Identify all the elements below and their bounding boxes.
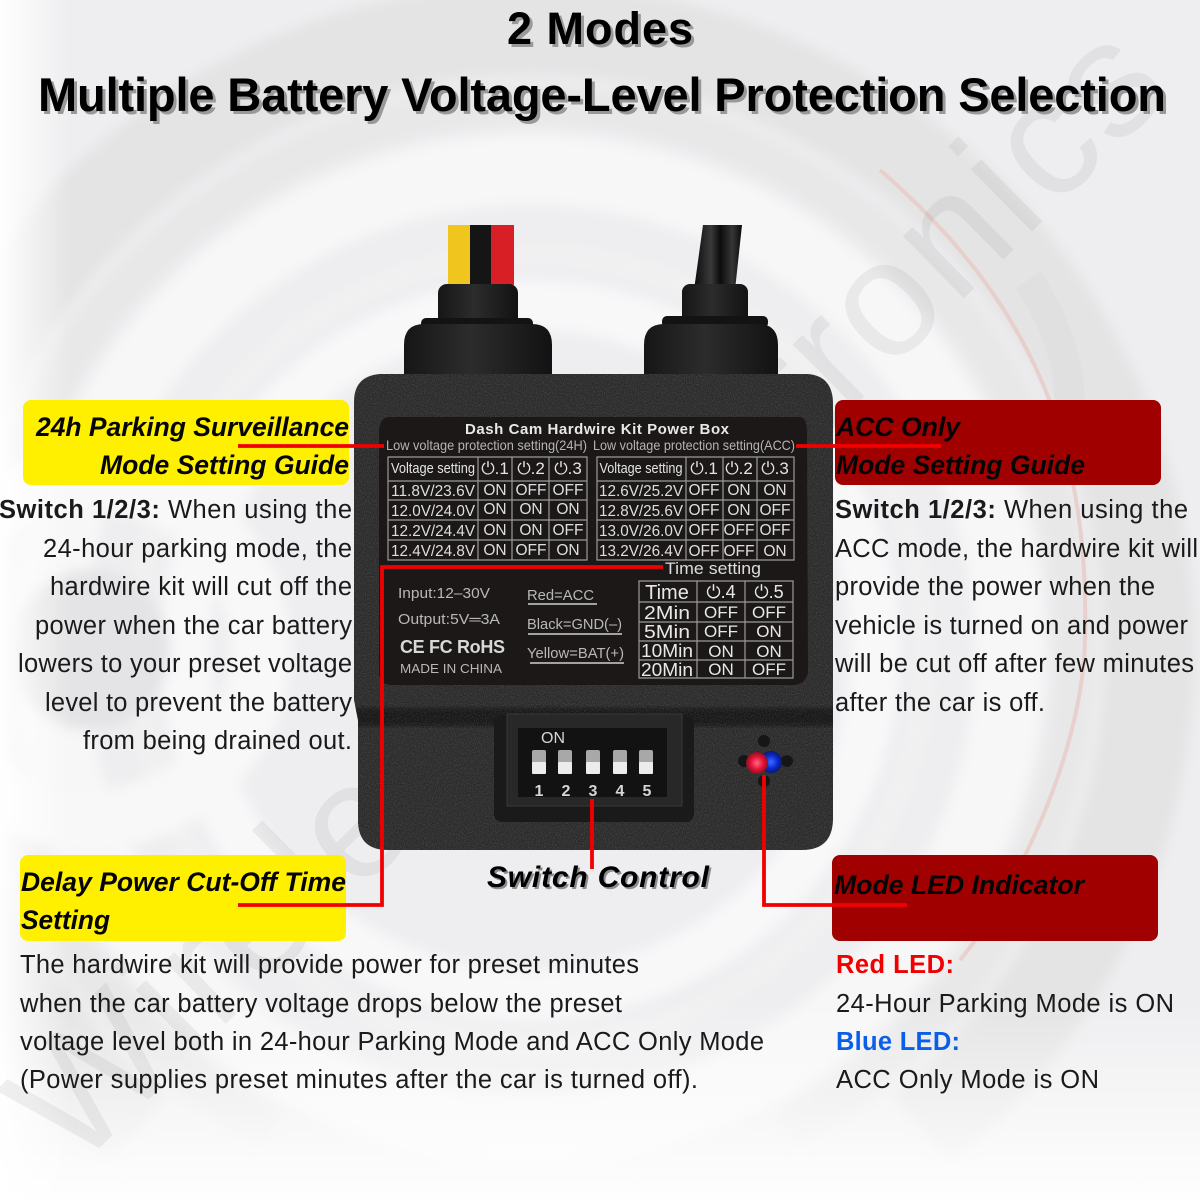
label: 24h parking guide: 24h Parking Surveillance	[35, 412, 349, 442]
text: delay description	[19, 951, 764, 1094]
text: ACC description: vehicle is turned on and power	[835, 612, 1188, 640]
switch numbers: 5	[643, 783, 652, 800]
time setting heading: Time setting	[665, 560, 761, 578]
table: ACC voltage: OFF	[724, 543, 754, 560]
text: delay description: The hardwire kit will provide power for preset minutes	[20, 951, 639, 979]
switches	[532, 750, 653, 774]
text: 24h parking description: power when the car battery	[35, 612, 352, 640]
table: ACC voltage: OFF	[688, 482, 720, 499]
table: ACC voltage: 13.0V/26.0V	[599, 523, 684, 540]
plate subtitles: Low voltage protection setting(ACC)	[593, 437, 795, 453]
text: LED legend: Blue LED:	[836, 1028, 960, 1056]
switch numbers: 2	[562, 783, 571, 800]
table: delay time: ON	[708, 660, 734, 679]
text: ACC description: after the car is off.	[835, 689, 1045, 717]
specs: Output:5V═3A	[398, 612, 500, 628]
label: 24h parking guide: Mode Setting Guide	[100, 450, 349, 480]
table: ACC voltage	[597, 457, 794, 560]
text: delay description: voltage level both in 24-hour Parking Mode and ACC Only Mode	[20, 1028, 764, 1056]
table: 24H voltage: 12.0V/24.0V	[391, 503, 476, 520]
table: ACC voltage: OFF	[688, 522, 720, 539]
table: ACC voltage: ON	[763, 482, 787, 499]
table: 24H voltage: ⏻.3	[554, 459, 582, 478]
table: ACC voltage: OFF	[688, 543, 720, 560]
label: ACC only guide: ACC Only	[835, 412, 962, 442]
text: ACC description: will be cut off after few minutes	[834, 650, 1194, 678]
table: 24H voltage: ON	[483, 522, 507, 539]
switch numbers: 3	[589, 783, 598, 800]
table: ACC voltage: ON	[763, 543, 787, 560]
wire legend: Red=ACC	[527, 588, 594, 604]
table: ACC voltage: OFF	[688, 502, 720, 519]
table: ACC voltage: ⏻.2	[725, 459, 753, 478]
label: switch control: Switch Control	[489, 863, 712, 896]
label plate	[379, 417, 808, 685]
text: LED legend	[836, 951, 1174, 1094]
title: Multiple Battery Voltage-Level Protection Selection	[38, 68, 1166, 121]
table: delay time	[639, 581, 793, 680]
table: 24H voltage: ON	[556, 542, 580, 559]
plate subtitles	[386, 437, 795, 453]
text: 24h parking description	[0, 496, 352, 755]
DIP switch block: ON	[541, 730, 565, 747]
text: 24h parking description: hardwire kit will cut off the	[50, 573, 352, 601]
specs: Input:12–30V	[398, 586, 490, 602]
callout lines	[238, 446, 941, 905]
table: delay time: 2Min	[644, 603, 690, 623]
icon: LED indicator	[738, 735, 793, 787]
table: ACC voltage: ON	[727, 482, 751, 499]
hardwire kit power box	[350, 225, 840, 850]
table: 24H voltage: ON	[519, 501, 543, 518]
table: 24H voltage: 12.4V/24.8V	[391, 543, 476, 560]
plate subtitles: Low voltage protection setting(24H)	[386, 437, 587, 453]
table: 24H voltage: OFF	[516, 482, 546, 499]
table: 24H voltage: ON	[556, 501, 580, 518]
text: ACC description	[834, 496, 1198, 717]
table: 24H voltage	[388, 457, 587, 560]
table: delay time: ⏻.4	[706, 582, 736, 602]
table: 24H voltage: ⏻.1	[481, 459, 509, 478]
label: mode LED indicator: Mode LED Indicator	[834, 870, 1085, 900]
cables	[448, 225, 742, 290]
table: 24H voltage: OFF	[552, 482, 584, 499]
table: 24H voltage: ON	[483, 501, 507, 518]
specs: CE FC RoHS	[400, 637, 505, 657]
table: delay time: 5Min	[644, 622, 690, 642]
table: delay time: OFF	[752, 660, 786, 679]
label: delay power cut-off	[20, 855, 346, 941]
table: delay time: ON	[756, 642, 782, 661]
table: 24H voltage: 11.8V/23.6V	[391, 483, 476, 500]
table: ACC voltage: ⏻.3	[761, 459, 789, 478]
label: ACC only guide	[835, 400, 1161, 485]
table: ACC voltage: 13.2V/26.4V	[599, 543, 684, 560]
text: LED legend: Red LED:	[836, 951, 954, 979]
table: ACC voltage: ON	[727, 502, 751, 519]
label: delay power cut-off: Delay Power Cut-Off Time	[21, 867, 346, 897]
label: ACC only guide: Mode Setting Guide	[836, 450, 1085, 480]
table: 24H voltage: ON	[483, 542, 507, 559]
text: LED legend: 24-Hour Parking Mode is ON	[836, 990, 1174, 1018]
switch numbers: 4	[616, 783, 625, 800]
table: ACC voltage: 12.8V/25.6V	[599, 503, 684, 520]
table: delay time: 10Min	[641, 641, 693, 661]
wire legend	[527, 588, 624, 663]
specs	[398, 586, 505, 676]
text: 24h parking description: from being drained out.	[83, 727, 352, 755]
table: 24H voltage: OFF	[552, 522, 584, 539]
table: delay time: ON	[756, 622, 782, 641]
text: ACC description: provide the power when the	[835, 573, 1155, 601]
label: 24h parking guide	[23, 400, 349, 485]
switch numbers: 1	[535, 783, 544, 800]
table: 24H voltage: ON	[483, 482, 507, 499]
table: delay time: ⏻.5	[754, 582, 784, 602]
text: 24h parking description: lowers to your preset voltage	[18, 650, 352, 678]
title: 2 Modes	[510, 6, 696, 57]
text: 24h parking description: level to prevent the battery	[45, 689, 352, 717]
text: delay description: (Power supplies preset minutes after the car is turned off).	[20, 1066, 698, 1094]
table: 24H voltage: ON	[519, 522, 543, 539]
title	[38, 3, 1169, 124]
text: ACC description: Switch 1/2/3: When using the	[835, 496, 1188, 524]
text: delay description: when the car battery voltage drops below the preset	[19, 990, 622, 1018]
label: delay power cut-off: Setting	[21, 905, 110, 935]
wire legend: Yellow=BAT(+)	[527, 646, 624, 662]
table: 24H voltage: 12.2V/24.4V	[391, 523, 476, 540]
table: ACC voltage: 12.6V/25.2V	[599, 483, 684, 500]
text: ACC description: ACC mode, the hardwire kit will	[835, 535, 1198, 563]
enclosure	[350, 374, 840, 850]
table: delay time: OFF	[752, 603, 786, 622]
table: 24H voltage: Voltage setting	[391, 460, 475, 477]
text: 24h parking description: Switch 1/2/3: When using the	[0, 496, 352, 524]
plate title: Dash Cam Hardwire Kit Power Box	[465, 421, 730, 438]
table: delay time: Time	[645, 582, 689, 604]
table: ACC voltage: OFF	[760, 522, 790, 539]
specs: MADE IN CHINA	[400, 661, 502, 676]
wire legend: Black=GND(–)	[527, 617, 622, 633]
table: ACC voltage: ⏻.1	[690, 459, 718, 478]
label: switch control: Switch Control	[487, 861, 710, 894]
table: ACC voltage: Voltage setting	[600, 460, 682, 477]
table: delay time: ON	[708, 642, 734, 661]
text: LED legend: ACC Only Mode is ON	[836, 1066, 1099, 1094]
table: delay time: OFF	[704, 603, 738, 622]
label: mode LED indicator	[832, 855, 1158, 941]
strain relief right	[644, 284, 778, 376]
switch numbers	[535, 783, 652, 800]
table: 24H voltage: ⏻.2	[517, 459, 545, 478]
strain relief left	[404, 284, 552, 376]
table: ACC voltage: OFF	[724, 522, 754, 539]
table: 24H voltage: OFF	[516, 542, 546, 559]
text: 24h parking description: 24-hour parking mode, the	[43, 535, 352, 563]
table: ACC voltage: OFF	[760, 502, 790, 519]
title: Multiple Battery Voltage-Level Protection Selection	[41, 71, 1169, 124]
title: 2 Modes	[507, 3, 693, 54]
table: delay time: OFF	[704, 622, 738, 641]
DIP switch block	[494, 714, 694, 822]
table: delay time: 20Min	[641, 660, 693, 680]
